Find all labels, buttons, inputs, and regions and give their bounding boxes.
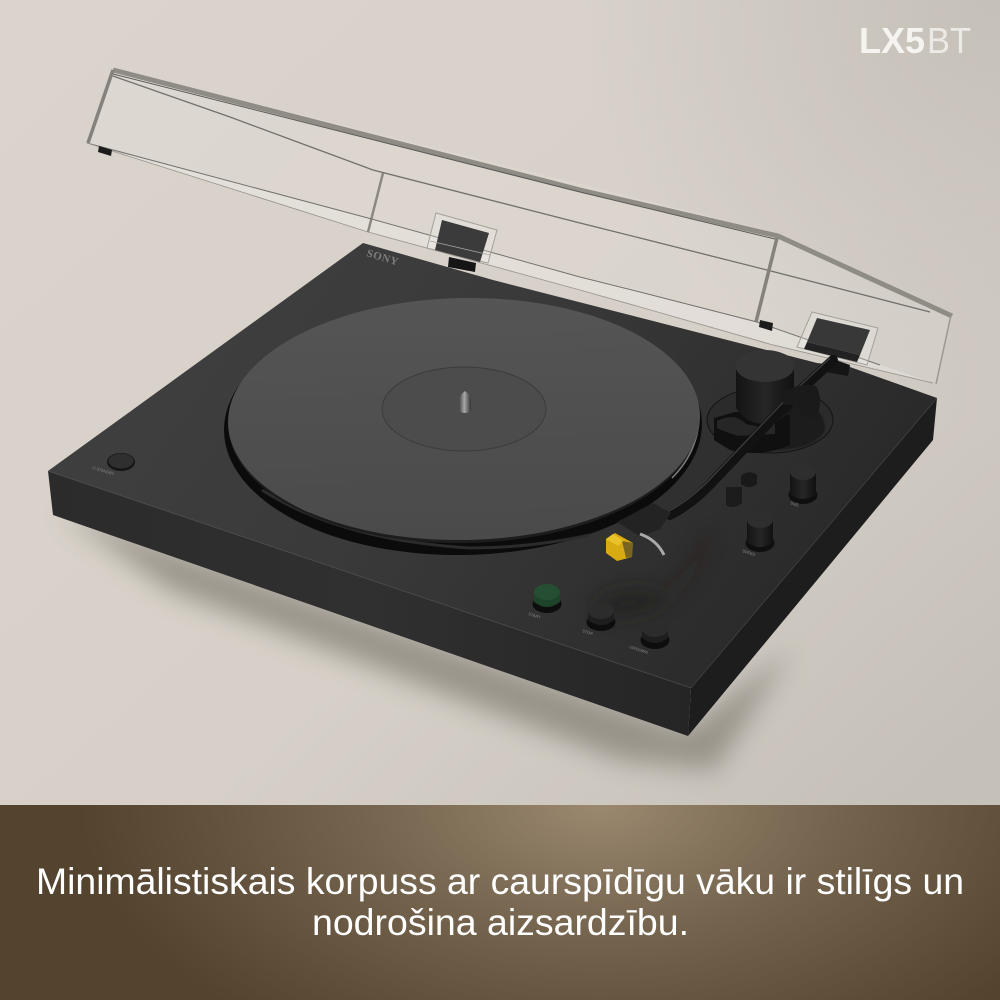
counterweight — [736, 366, 794, 424]
tonearm reflection — [593, 530, 712, 621]
SONY logo: SONY — [365, 247, 400, 269]
finger lift — [640, 534, 664, 555]
gimbal — [714, 412, 790, 453]
caption text: nodrošina aizsardzību. — [312, 902, 689, 943]
up/down label: UP/DOWN — [629, 644, 649, 655]
hinge glass — [797, 312, 878, 365]
power button — [92, 453, 135, 476]
cover seam left — [368, 173, 383, 232]
tonearm base — [707, 350, 833, 453]
hinge foot — [826, 358, 850, 376]
hinge left — [427, 213, 497, 272]
arm tube — [670, 360, 833, 515]
up/down button — [629, 621, 670, 655]
platter bevel — [226, 295, 702, 547]
spindle — [459, 391, 471, 413]
centre label — [382, 367, 546, 451]
cover catch left — [98, 146, 112, 156]
cover right edge — [936, 315, 951, 384]
plinth top — [48, 243, 937, 688]
arm rest — [726, 472, 757, 507]
tonearm — [606, 358, 833, 561]
plinth shadow — [60, 510, 790, 770]
pivot collar — [783, 385, 820, 418]
cover panel — [87, 68, 952, 384]
caption banner — [0, 805, 1000, 1000]
size knob label: SIZE — [790, 500, 800, 508]
start label: START — [528, 611, 542, 620]
power label: ⏻ STANDBY — [92, 465, 115, 476]
hinge right — [797, 312, 878, 376]
plinth left face — [48, 471, 691, 736]
cover ridge seam — [113, 76, 930, 312]
cover left edge — [88, 70, 113, 143]
hinge block — [435, 220, 489, 262]
caption text — [36, 861, 964, 943]
model name — [859, 20, 971, 61]
hinge block — [807, 318, 870, 355]
cover seam right — [756, 238, 777, 322]
cover lower lines — [87, 143, 880, 365]
cover top edge — [113, 70, 952, 316]
size knob — [788, 464, 818, 508]
cover catch right — [759, 320, 773, 331]
turntable plinth — [48, 243, 937, 736]
hinge foot — [448, 257, 476, 272]
speed knob label: SPEED — [742, 548, 756, 557]
start button — [528, 584, 562, 620]
stop button — [582, 603, 616, 636]
base plate — [707, 387, 833, 453]
cartridge body — [606, 533, 633, 561]
platter rim — [222, 295, 704, 559]
plinth right face — [688, 398, 937, 736]
hinge glass — [427, 213, 497, 263]
platter mat — [226, 294, 702, 544]
stop label: STOP — [582, 628, 594, 636]
caption text: Minimālistiskais korpuss ar caurspīdīgu vāku ir stilīgs un — [36, 861, 964, 902]
headshell — [617, 503, 671, 537]
speed knob — [742, 512, 774, 557]
model name: BT — [927, 20, 971, 61]
model name: LX5 — [859, 20, 925, 61]
dust cover — [87, 68, 952, 384]
banner background — [0, 805, 1000, 1000]
platter — [222, 294, 704, 559]
